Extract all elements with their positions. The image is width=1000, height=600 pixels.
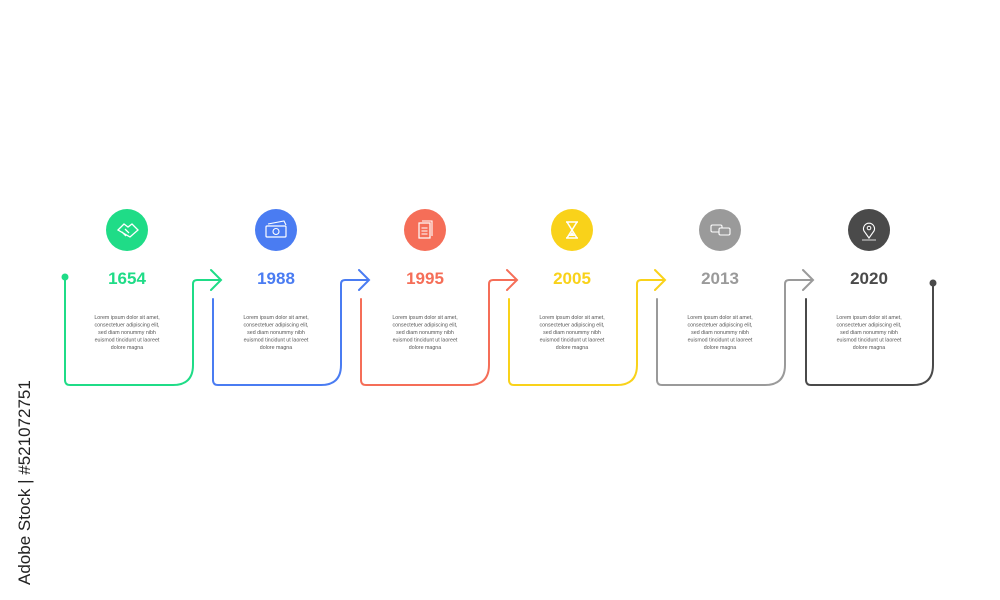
text block: Lorem ipsum dolor sit amet, [243, 315, 309, 321]
text block: consectetuer adipiscing elit, [392, 322, 458, 328]
text block [687, 315, 753, 351]
text block: Lorem ipsum dolor sit amet, [687, 315, 753, 321]
text block [392, 315, 458, 351]
connector line 6 [806, 283, 933, 385]
text block: sed diam nonummy nibh [543, 330, 601, 336]
text block: Lorem ipsum dolor sit amet, [94, 315, 160, 321]
icon: hourglass [551, 209, 593, 251]
text block: euismod tincidunt ut laoreet [540, 338, 605, 344]
icon: handshake [106, 209, 148, 251]
text block [836, 315, 902, 351]
end dot [930, 280, 936, 286]
connector line 4 [509, 270, 665, 385]
year: 2013 [701, 269, 739, 288]
step 4: 2005 [509, 209, 665, 385]
text block [94, 315, 160, 351]
year: 1988 [257, 269, 295, 288]
text block: Lorem ipsum dolor sit amet, [539, 315, 605, 321]
text block: sed diam nonummy nibh [396, 330, 454, 336]
watermark id: Adobe Stock | #521072751 [15, 380, 34, 585]
year: 2005 [553, 269, 591, 288]
start dot [62, 274, 68, 280]
year: 1654 [108, 269, 146, 288]
text block: sed diam nonummy nibh [691, 330, 749, 336]
text block: sed diam nonummy nibh [840, 330, 898, 336]
text block: sed diam nonummy nibh [98, 330, 156, 336]
text block: dolore magna [704, 345, 736, 351]
year: 2020 [850, 269, 888, 288]
text block: consectetuer adipiscing elit, [687, 322, 753, 328]
connector line 5 [657, 270, 813, 385]
text block: dolore magna [853, 345, 885, 351]
year: 1995 [406, 269, 444, 288]
text block: euismod tincidunt ut laoreet [244, 338, 309, 344]
step 2: 1988 [213, 209, 369, 385]
text block: Lorem ipsum dolor sit amet, [392, 315, 458, 321]
text block: euismod tincidunt ut laoreet [95, 338, 160, 344]
text block: euismod tincidunt ut laoreet [393, 338, 458, 344]
step 5: 2013 [657, 209, 813, 385]
text block: dolore magna [409, 345, 441, 351]
step 6: 2020 [806, 209, 936, 385]
text block: euismod tincidunt ut laoreet [837, 338, 902, 344]
connector line 1 [65, 270, 221, 385]
text block: Lorem ipsum dolor sit amet, [836, 315, 902, 321]
text block: euismod tincidunt ut laoreet [688, 338, 753, 344]
icon: money [255, 209, 297, 251]
text block: consectetuer adipiscing elit, [243, 322, 309, 328]
step 3: 1995 [361, 209, 517, 385]
icon: documents [404, 209, 446, 251]
text block: consectetuer adipiscing elit, [94, 322, 160, 328]
text block: dolore magna [260, 345, 292, 351]
text block: dolore magna [556, 345, 588, 351]
icon: chat bubbles [699, 209, 741, 251]
connector line 3 [361, 270, 517, 385]
connector line 2 [213, 270, 369, 385]
step 1: 1654 [62, 209, 221, 385]
text block [539, 315, 605, 351]
text block: sed diam nonummy nibh [247, 330, 305, 336]
text block: consectetuer adipiscing elit, [836, 322, 902, 328]
text block: dolore magna [111, 345, 143, 351]
text block: consectetuer adipiscing elit, [539, 322, 605, 328]
text block [243, 315, 309, 351]
icon: location pin [848, 209, 890, 251]
